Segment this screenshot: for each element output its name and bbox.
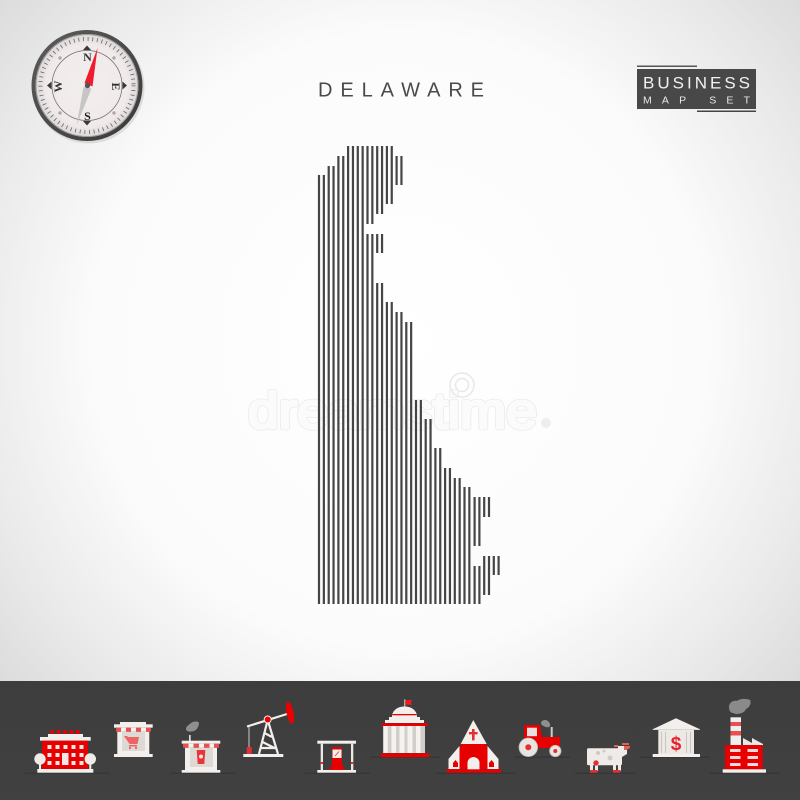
icon: gas station [317, 741, 356, 773]
compass [32, 32, 144, 144]
icon: bank: $ [671, 734, 682, 755]
watermark: dreamstime [248, 383, 537, 439]
compass bezel [34, 32, 140, 139]
icon: office building [34, 730, 96, 773]
compass: E [109, 82, 123, 91]
icon: factory [723, 699, 766, 773]
business map set badge: BUSINESS [643, 74, 750, 92]
icon: cow [587, 743, 630, 773]
compass: S [84, 109, 91, 123]
bottom band [0, 681, 800, 800]
business map set badge [637, 66, 756, 112]
icon: church [447, 720, 501, 773]
compass: W [51, 80, 65, 92]
icon: shop with cart [114, 722, 153, 757]
icon: oil pump jack [243, 701, 296, 757]
business map set badge: MAP SET [643, 94, 751, 106]
icon: coffee shop [182, 722, 220, 773]
watermark: dreamstime [248, 383, 537, 439]
map: Delaware vertical stripes [319, 146, 499, 604]
compass: N [83, 50, 92, 64]
title: DELAWARE [318, 80, 484, 102]
icon: bank [653, 718, 700, 757]
icon: tractor [519, 720, 561, 757]
icon ground shadows [25, 756, 780, 774]
icon: capitol building [381, 699, 429, 757]
